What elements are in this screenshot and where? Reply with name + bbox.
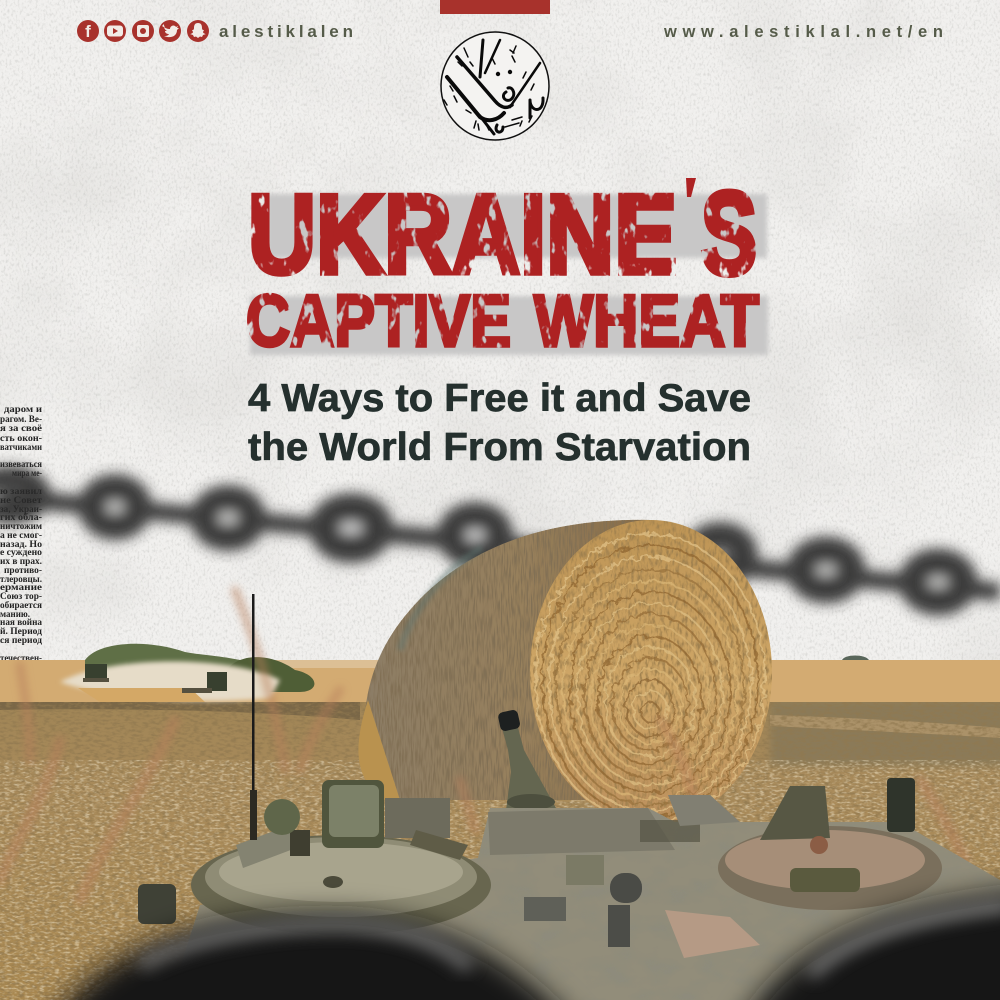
icon: twitter [159,20,181,42]
newspaper clipping column: ная война [0,617,42,628]
newspaper clipping column: не Совет [0,495,42,506]
newspaper clipping column: их в прах. [0,556,42,567]
newspaper clipping column: гих обла- [0,512,42,523]
newspaper clipping column: извеваться [0,459,42,470]
social icons [77,20,209,42]
wheat field [0,702,1000,1000]
blurred chain [0,477,1000,601]
blurred foreground chain links [40,890,1000,1000]
newspaper clipping column: за, Украи- [0,504,42,515]
newspaper clipping column: ватчиками [0,442,42,453]
tree line and dust [85,644,240,672]
subtitle: the World From Starvation [248,426,751,469]
newspaper clipping column: й. Период [0,626,42,637]
sand band [0,660,1000,704]
newspaper clipping column: сть окон- [0,433,42,444]
newspaper clipping column: Союз тор- [0,591,42,602]
title: CAPTIVE WHEAT [246,281,768,362]
tank [138,594,1000,1000]
newspaper clipping column [0,404,43,664]
title: UKRAINE'S: S [701,168,757,300]
newspaper clipping column: а не смог- [0,530,42,541]
tank hull pink panels [665,910,760,958]
harvester left [83,664,109,682]
title: CAPTIVE WHEAT: CAPTIVE [246,281,511,362]
tank periscope block [290,780,468,860]
tank hull [170,808,1000,1000]
newspaper clipping column: даром и [4,404,43,415]
top red bar [440,0,550,14]
tank gun barrel [497,709,556,810]
tank center plate [488,808,700,947]
tank side box [138,884,176,924]
tank antenna [250,594,300,840]
icon: youtube [104,20,126,42]
newspaper clipping column: противо- [4,565,42,576]
icon: snapchat [187,20,209,42]
subtitle [248,377,751,469]
harvester right [182,672,227,693]
logo: calligraphy roundel [441,32,549,140]
subtitle: 4 Ways to Free it and Save [248,377,751,420]
social handle: alestiklalen [219,22,353,41]
landscape [0,644,1000,1000]
newspaper clipping column: я за своё [0,423,43,434]
newspaper clipping column: е суждено [0,547,42,558]
title shadow line 2 [250,296,768,355]
tank right hatch [668,778,942,910]
icon: instagram [132,20,154,42]
bale body [365,520,650,800]
title: CAPTIVE WHEAT: WHEAT [534,281,759,362]
newspaper clipping column: ничтожим [0,521,42,532]
website url: www.alestiklal.net/en [663,23,943,41]
newspaper clipping column: рагом. Ве- [0,414,42,425]
hay bale [358,520,772,824]
tank turret hatch left [191,825,491,935]
title shadow line 1 [267,194,767,258]
newspaper clipping column: мира ме- [12,468,42,479]
newspaper clipping column: ю заявил [0,486,43,497]
newspaper clipping column: течествен- [0,653,42,664]
icon: facebook: f [85,22,91,41]
newspaper clipping column: тлеровцы. [0,574,42,585]
blurred wheat stalks [0,590,965,900]
newspaper clipping column: обирается [0,600,42,611]
newspaper clipping column: назад. Но [0,539,42,550]
newspaper clipping column: манию. [0,609,30,620]
newspaper clipping column: ермание [0,582,43,593]
newspaper clipping column: ся период [0,635,42,646]
bale face [530,520,772,824]
title: UKRAINE'S: UKRAINE [248,172,677,297]
